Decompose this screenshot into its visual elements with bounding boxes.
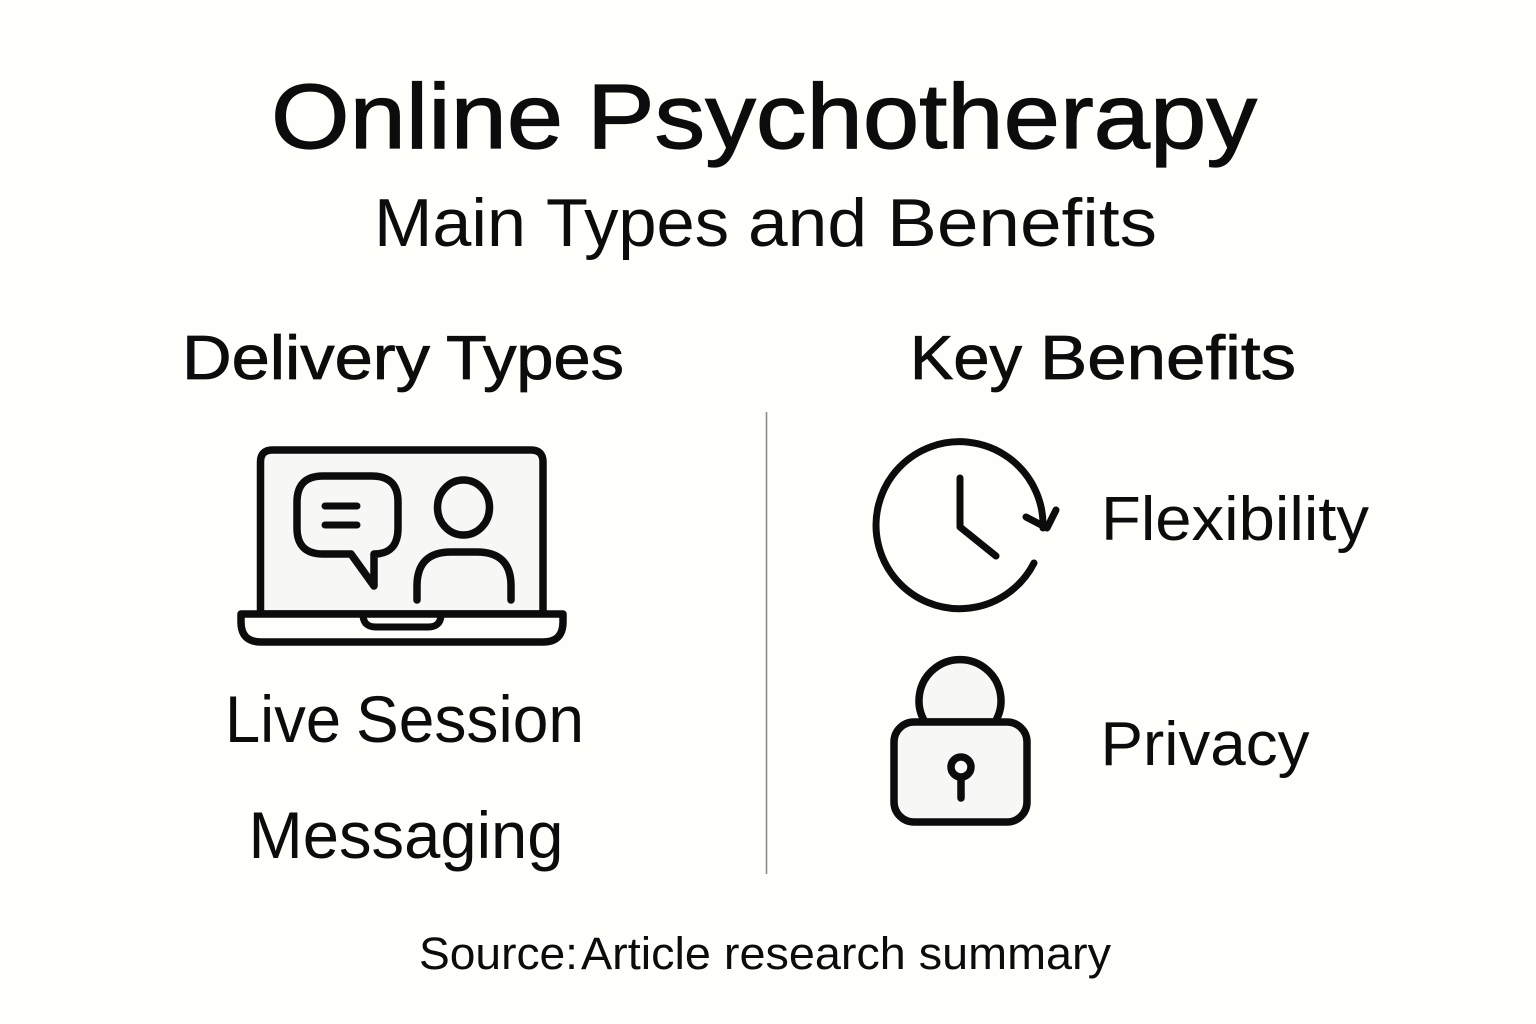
label: live session: [225, 682, 584, 756]
heading: key benefits: [910, 324, 1296, 393]
source note: Article research summary: [581, 928, 1112, 979]
label: privacy: Privacy: [1100, 710, 1310, 779]
subtitle: and: [748, 185, 867, 261]
subtitle: [374, 185, 1157, 261]
heading: key benefits: Key: [910, 324, 1022, 393]
heading: delivery types: Delivery: [182, 324, 430, 393]
laptop screen: [260, 450, 543, 614]
person head: [438, 480, 490, 535]
icon: laptop with chat and person: [241, 450, 563, 642]
chat bubble: [297, 476, 398, 586]
chat lines: [325, 506, 357, 525]
icon: padlock: [894, 660, 1027, 822]
heading: delivery types: [182, 324, 624, 393]
title: [271, 66, 1257, 168]
heading: key benefits: Benefits: [1040, 324, 1296, 393]
laptop notch: [363, 616, 441, 627]
label: live session: Live: [225, 682, 341, 756]
icon: clock with arrow: [876, 442, 1056, 609]
source note: Source:: [419, 928, 578, 979]
heading: delivery types: Types: [446, 324, 624, 393]
title: Psychotherapy: [587, 66, 1257, 168]
label: flexibility: Flexibility: [1101, 485, 1369, 554]
laptop base: [241, 614, 563, 642]
subtitle: Main: [374, 185, 526, 261]
person shoulders: [417, 552, 511, 600]
subtitle: Benefits: [887, 185, 1157, 261]
label: messaging: Messaging: [248, 798, 564, 872]
title: Online: [271, 66, 563, 168]
divider: [766, 412, 768, 874]
subtitle: Types: [546, 185, 729, 261]
label: live session: Session: [356, 682, 584, 756]
